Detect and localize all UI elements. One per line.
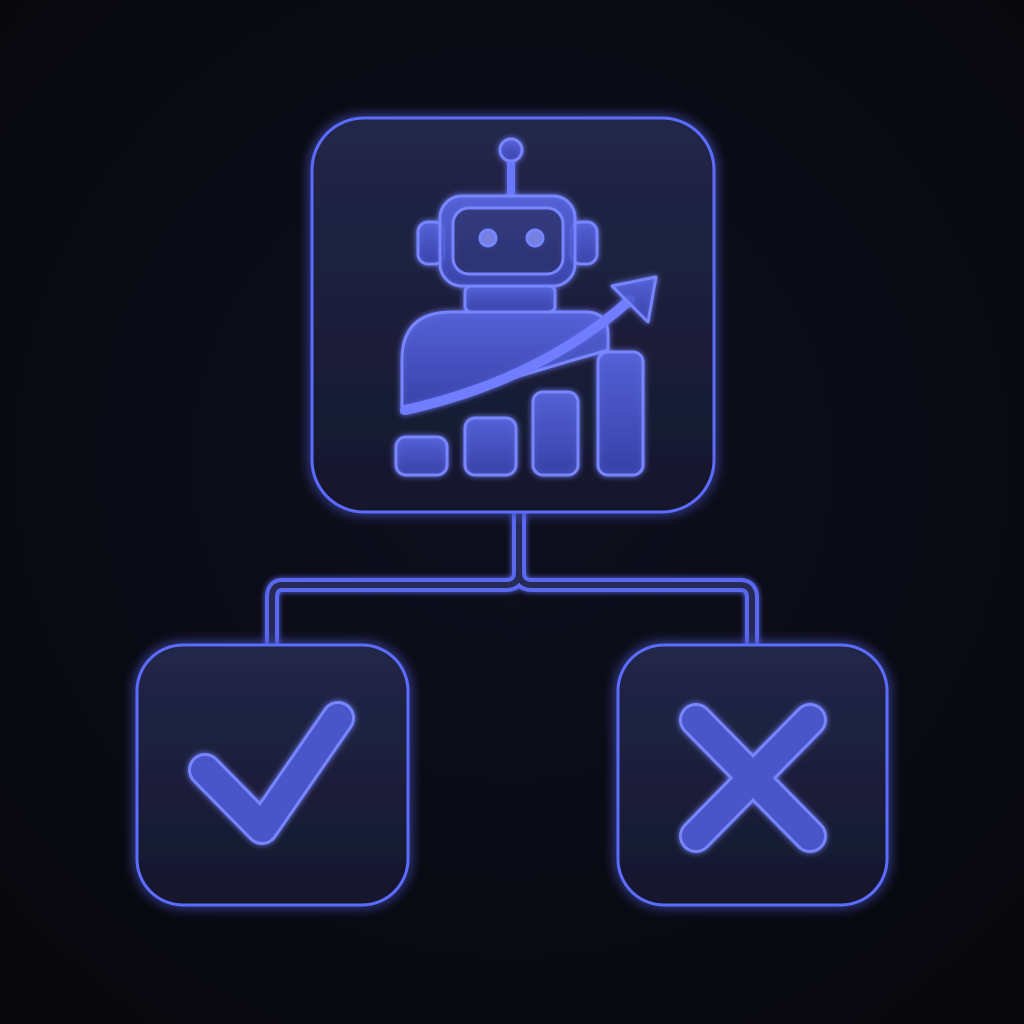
icon: checkmark bbox=[205, 718, 338, 828]
antenna bbox=[507, 160, 515, 196]
ears bbox=[418, 222, 444, 264]
panel: reject box bbox=[618, 645, 887, 905]
panel: AI robot box bbox=[312, 118, 714, 512]
body bbox=[402, 312, 608, 412]
connector lines bbox=[272, 512, 752, 645]
icon: cross bbox=[696, 720, 810, 836]
eyes bbox=[480, 230, 496, 246]
arrow bbox=[405, 300, 630, 410]
neck bbox=[465, 286, 555, 312]
panel: approve box bbox=[137, 645, 408, 905]
head bbox=[440, 196, 575, 286]
icon: robot with growth chart bbox=[396, 139, 656, 475]
bars bbox=[396, 437, 447, 475]
